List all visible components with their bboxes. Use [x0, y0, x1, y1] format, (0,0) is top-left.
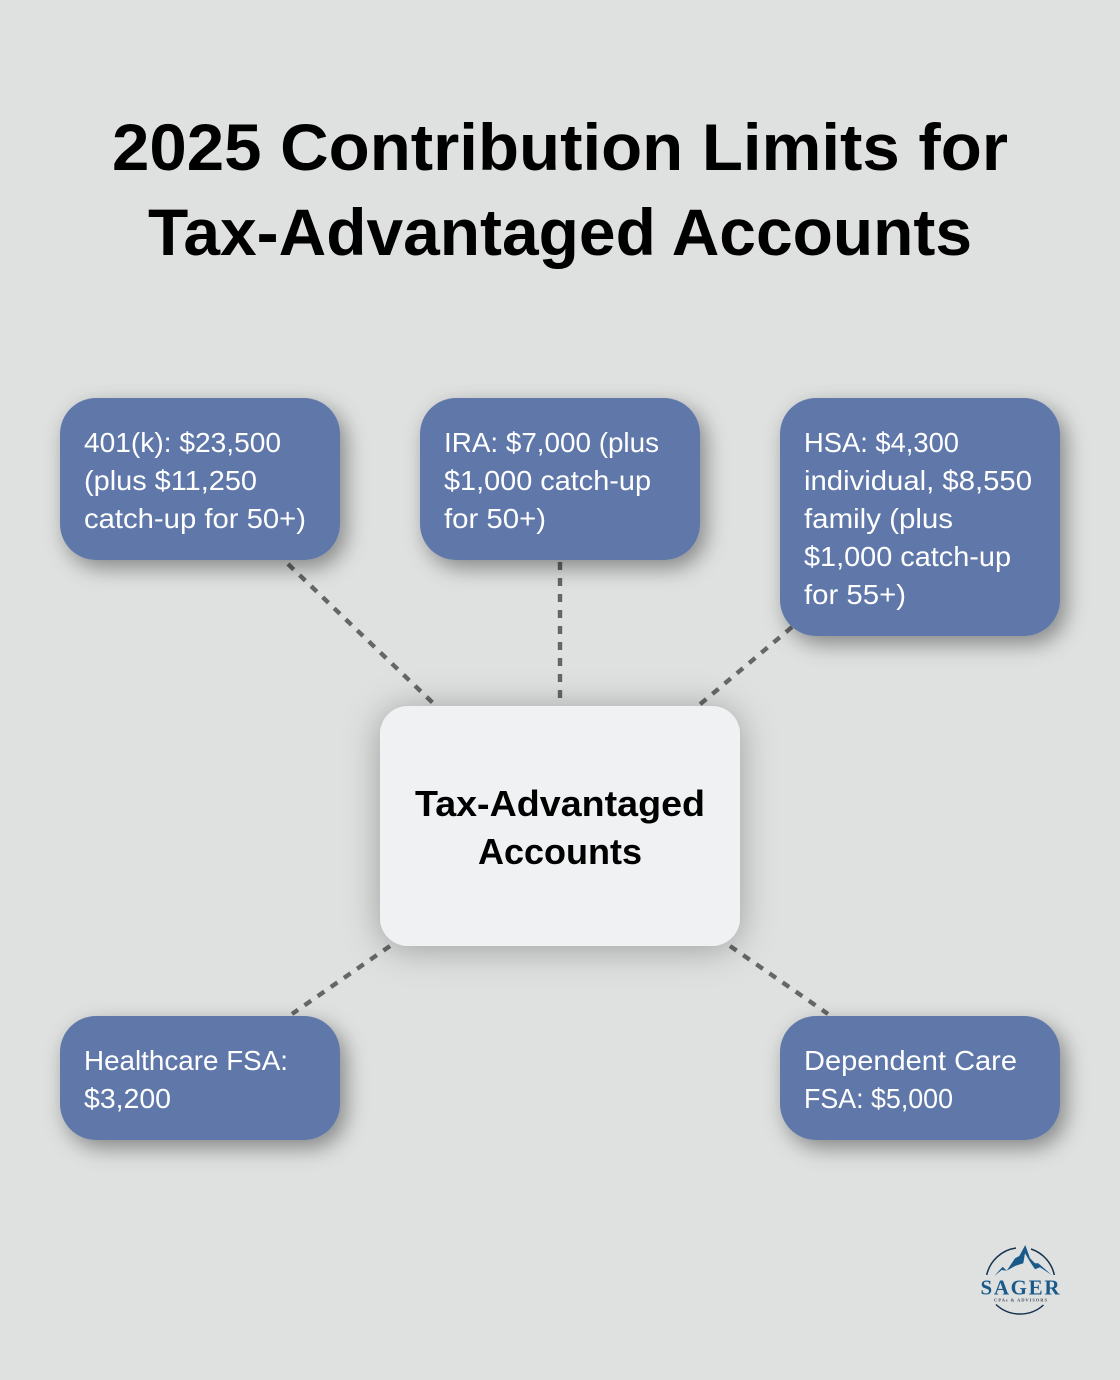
title: Tax-Advantaged Accounts — [148, 195, 972, 269]
panel: IRA — [420, 398, 700, 560]
panel: 401(k): (plus $11,250 — [84, 465, 257, 496]
panel: 401(k): 401(k): $23,500 — [84, 427, 281, 458]
panel: Dependent Care FSA: FSA: $5,000 — [804, 1083, 953, 1114]
panel: center Tax-Advantaged Accounts: Accounts — [478, 831, 642, 872]
panel: HSA: for 55+) — [804, 579, 906, 610]
panel: HSA — [780, 398, 1060, 636]
title: 2025 Contribution Limits for — [112, 110, 1008, 184]
icon: Sager logo: CPAs & ADVISORS — [994, 1298, 1047, 1302]
icon: Sager logo: SAGER — [980, 1275, 1060, 1299]
panel: Dependent Care FSA — [780, 1016, 1060, 1140]
icon: Sager logo — [980, 1245, 1060, 1314]
panel: center Tax-Advantaged Accounts: Tax-Advantaged — [415, 783, 705, 824]
panel: 401(k) — [60, 398, 340, 560]
panel: center Tax-Advantaged Accounts — [380, 706, 740, 946]
panel: IRA: for 50+) — [444, 503, 546, 534]
panel: HSA: HSA: $4,300 — [804, 427, 959, 458]
panel: IRA: $1,000 catch-up — [444, 465, 651, 496]
panel: HSA: family (plus — [804, 503, 953, 534]
panel: HSA: $1,000 catch-up — [804, 541, 1011, 572]
panel: HSA: individual, $8,550 — [804, 465, 1032, 496]
panel: Healthcare FSA: $3,200 — [84, 1083, 171, 1114]
panel: 401(k): catch-up for 50+) — [84, 503, 306, 534]
panel: Healthcare FSA — [60, 1016, 340, 1140]
panel: Dependent Care FSA: Dependent Care — [804, 1045, 1017, 1076]
connector lines — [288, 562, 828, 1014]
title — [112, 110, 1008, 269]
panel: IRA: IRA: $7,000 (plus — [444, 427, 659, 458]
panel: Healthcare FSA: Healthcare FSA: — [84, 1045, 288, 1076]
